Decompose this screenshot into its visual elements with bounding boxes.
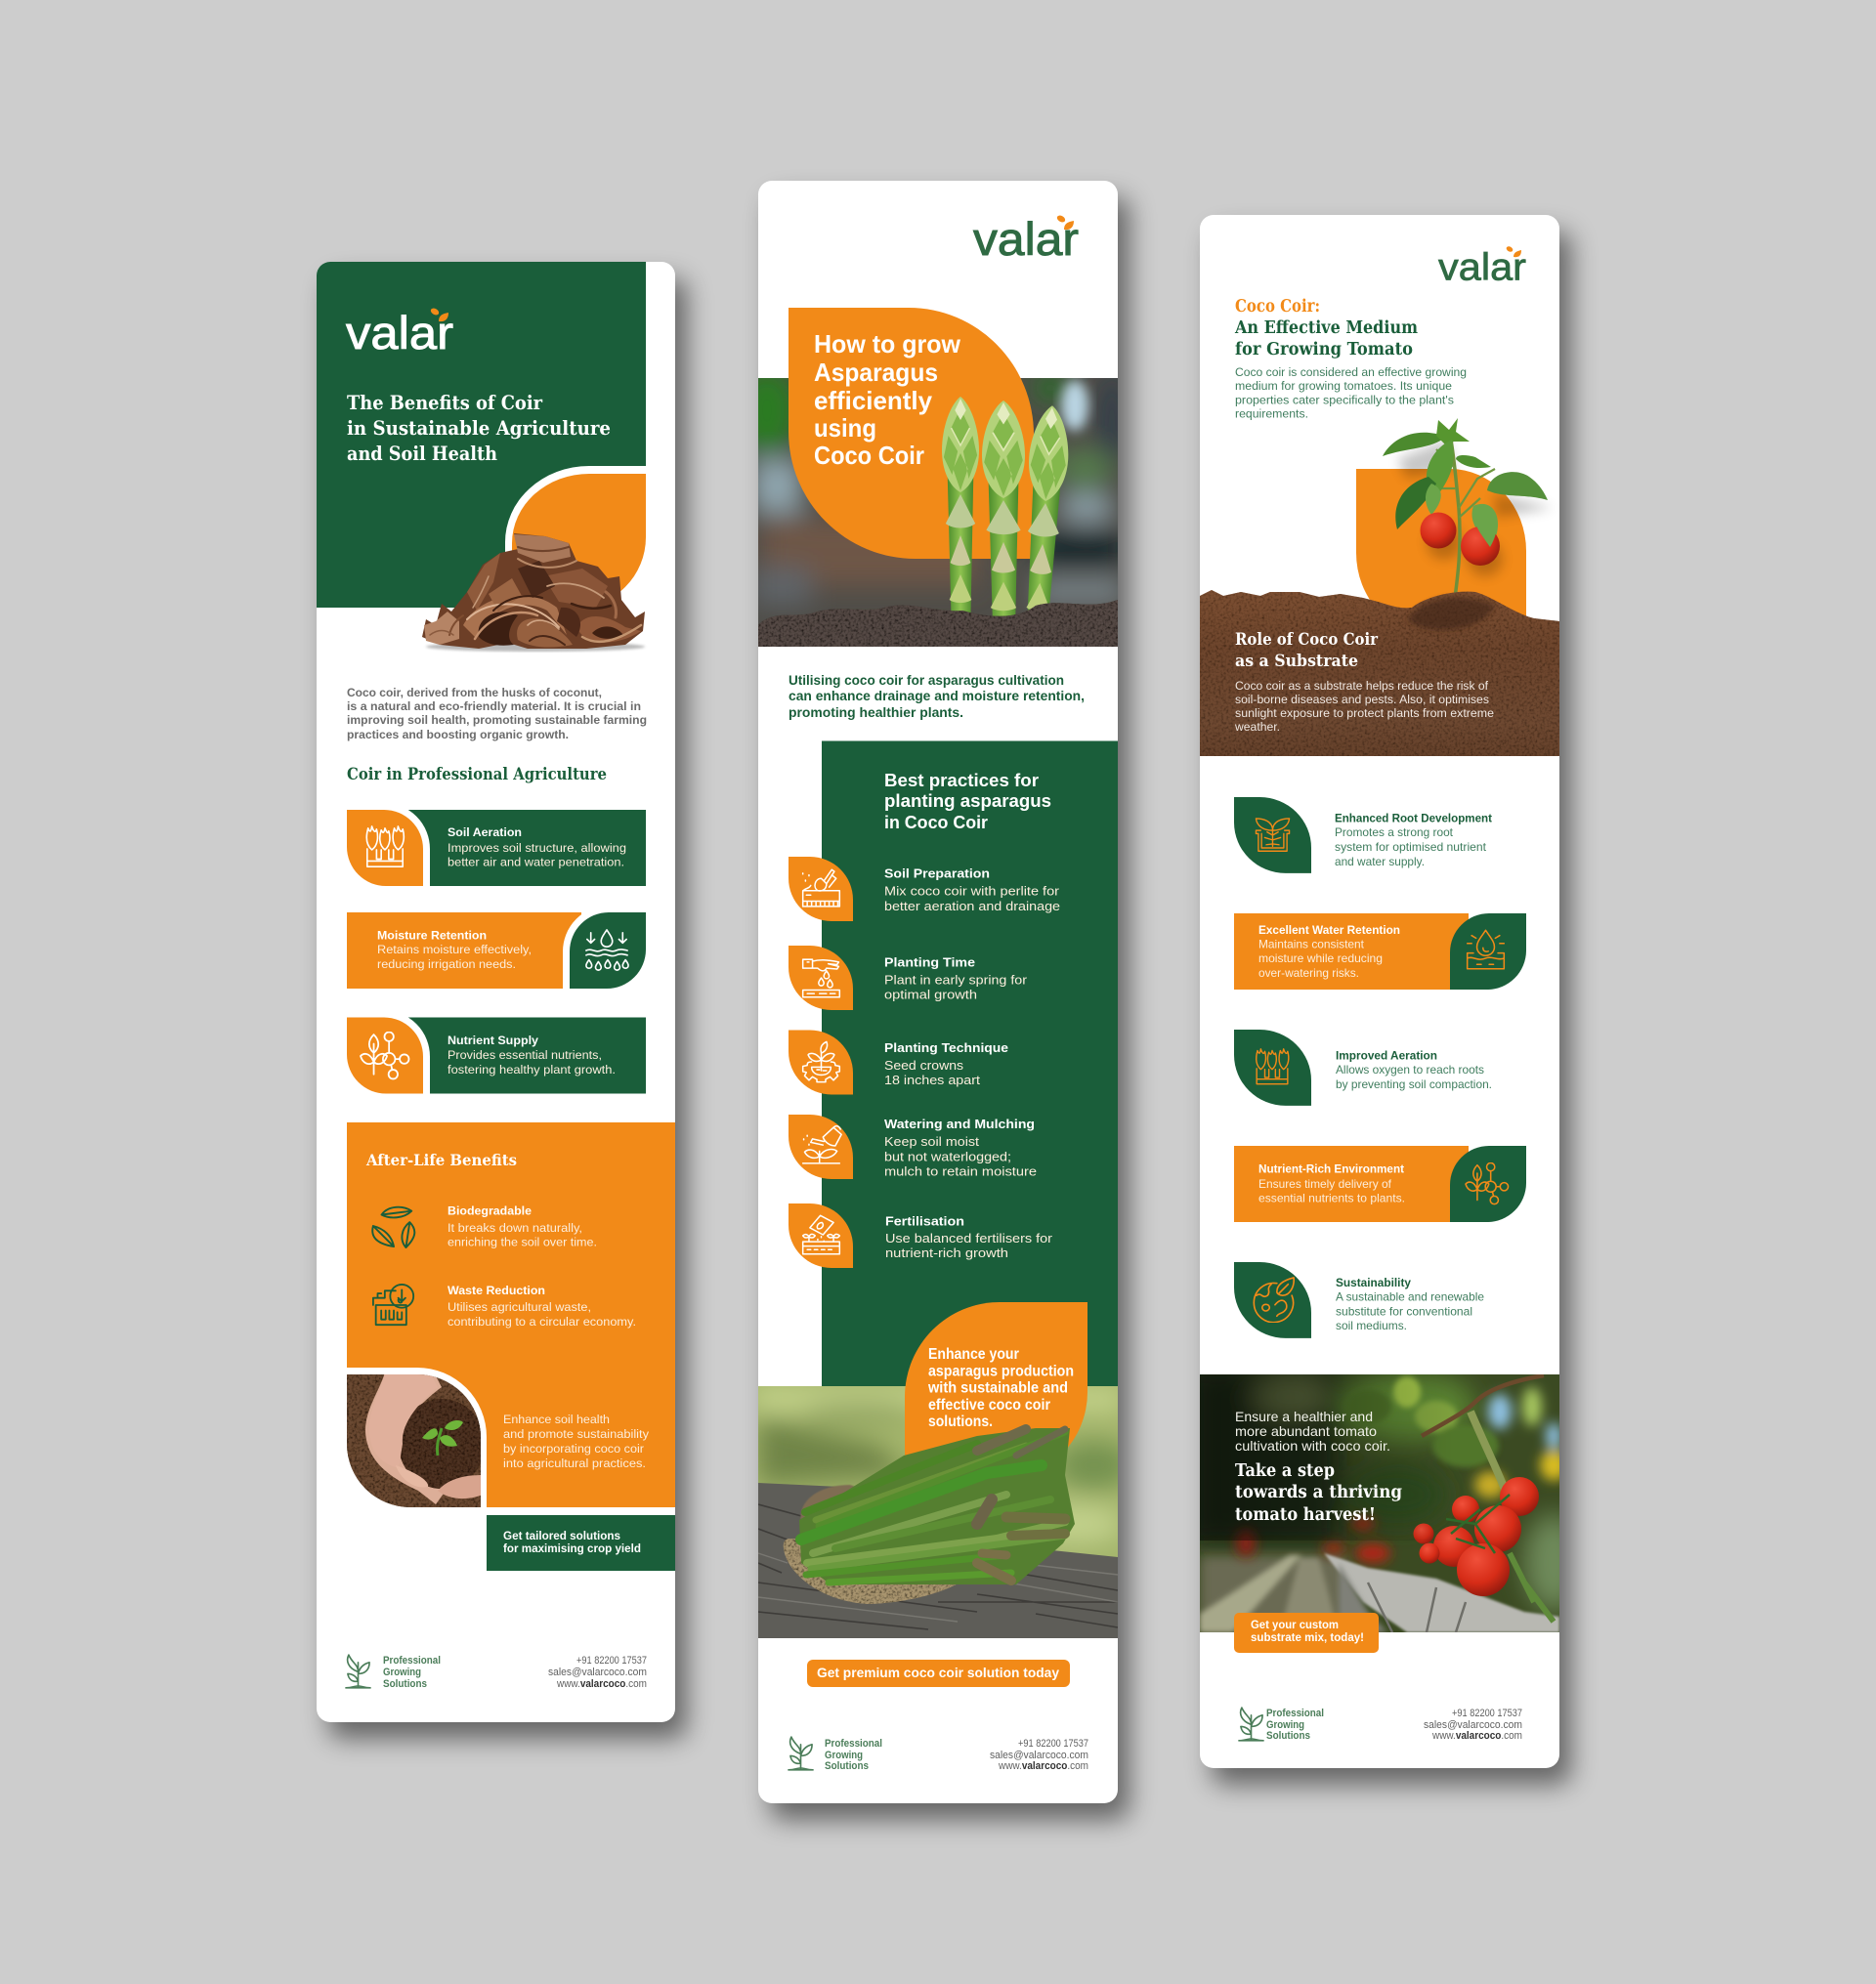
button: substrate mix, today! <box>1251 1632 1364 1644</box>
row: nutrient supply: Nutrient Supply <box>448 1034 538 1047</box>
footer: sales@valarcoco.com <box>1424 1719 1522 1731</box>
orange leaf shape with title: Asparagus <box>814 358 938 387</box>
closing text: Enhance soil health <box>503 1413 610 1426</box>
step: planting technique: Planting Technique <box>884 1040 1008 1055</box>
intro text: practices and boosting organic growth. <box>347 728 569 741</box>
heading <box>884 770 1051 832</box>
closing text: into agricultural practices. <box>503 1456 646 1470</box>
title: An Effective Medium <box>1234 318 1418 338</box>
intro text <box>789 672 1085 720</box>
intro text: Utilising coco coir for asparagus cultivation <box>789 672 1064 688</box>
closing text <box>1235 1409 1390 1454</box>
substrate text: soil-borne diseases and pests. Also, it optimises <box>1235 693 1489 706</box>
substrate text: sunlight exposure to protect plants from extreme <box>1235 706 1494 720</box>
row: enhanced root development: and water supply. <box>1335 855 1425 868</box>
intro text: promoting healthier plants. <box>789 704 963 720</box>
photo: greenhouse tomatoes <box>1192 1368 1583 1633</box>
intro text <box>1235 365 1467 420</box>
row: moisture retention: reducing irrigation needs. <box>377 957 516 971</box>
title <box>347 395 610 461</box>
closing text <box>503 1413 650 1470</box>
call to action <box>487 1515 675 1571</box>
white cut-out <box>347 1368 487 1509</box>
row: moisture retention: Retains moisture effectively, <box>377 943 532 956</box>
button: Get premium coco coir solution today <box>817 1665 1059 1680</box>
intro text <box>347 686 647 741</box>
row: enhanced root development: system for optimised nutrient <box>1335 840 1487 854</box>
row: excellent water retention: over-watering risks. <box>1258 966 1359 980</box>
footer: +91 82200 17537 <box>1018 1738 1088 1750</box>
row: nutrient-rich environment: essential nutrients to plants. <box>1258 1192 1405 1205</box>
step: watering and mulching: Keep soil moist <box>884 1134 979 1149</box>
closing text: more abundant tomato <box>1235 1423 1377 1439</box>
step: fertilisation: nutrient-rich growth <box>885 1245 1008 1260</box>
orange callout leaf: with sustainable and <box>927 1380 1068 1397</box>
intro text: Coco coir, derived from the husks of coconut, <box>347 686 602 699</box>
footer <box>346 1655 647 1690</box>
row: nutrient supply: fostering healthy plant growth. <box>448 1063 616 1076</box>
row: improved aeration: by preventing soil compaction. <box>1336 1077 1492 1091</box>
waste reduction text: Utilises agricultural waste, <box>448 1300 591 1314</box>
row: improved aeration <box>1234 1030 1492 1106</box>
logo: valar <box>1438 247 1526 289</box>
row: nutrient supply <box>347 1018 646 1094</box>
row: sustainability: Sustainability <box>1336 1276 1411 1289</box>
heading: in Coco Coir <box>884 812 988 832</box>
row: nutrient-rich environment <box>1234 1146 1526 1222</box>
orange leaf shape with title <box>789 308 1034 559</box>
footer: Growing <box>1266 1719 1304 1731</box>
title: for Growing Tomato <box>1235 340 1413 359</box>
step: soil preparation: Mix coco coir with perlite for <box>884 883 1060 898</box>
call-out heading: towards a thriving <box>1235 1483 1402 1502</box>
row: excellent water retention <box>1234 913 1526 990</box>
footer: www.valarcoco.com <box>998 1760 1088 1772</box>
step: planting time: optimal growth <box>884 987 977 1002</box>
step: fertilisation: Fertilisation <box>885 1214 964 1229</box>
substrate text <box>1234 679 1494 734</box>
orange callout leaf <box>905 1302 1087 1480</box>
orange callout leaf: asparagus production <box>928 1364 1074 1380</box>
button: Get your custom <box>1251 1620 1339 1631</box>
step: planting technique: Seed crowns <box>884 1058 963 1073</box>
substrate heading: as a Substrate <box>1235 652 1358 670</box>
orange leaf shape with title: Coco Coir <box>814 441 924 470</box>
step: watering and mulching <box>789 1115 1037 1179</box>
photo: asparagus shoots background <box>758 378 1118 625</box>
call to action: Get tailored solutions <box>503 1531 620 1542</box>
panel: card 1, benefits of coir <box>317 262 675 1722</box>
orange leaf shape <box>512 474 646 592</box>
orange callout leaf: effective coco coir <box>928 1397 1050 1414</box>
icon: recycling leaves <box>372 1207 414 1247</box>
orange callout leaf: solutions. <box>928 1414 993 1430</box>
photo: coir husk pile <box>422 533 645 652</box>
orange leaf shape with title: efficiently <box>814 386 933 415</box>
waste reduction text: Waste Reduction <box>448 1284 545 1297</box>
orange leaf shape with title: How to grow <box>814 329 961 359</box>
intro text: is a natural and eco-friendly material. It is crucial in <box>347 699 641 713</box>
closing text: Ensure a healthier and <box>1235 1409 1373 1424</box>
step: planting technique: 18 inches apart <box>884 1073 980 1087</box>
biodegradable text: It breaks down naturally, <box>448 1221 582 1235</box>
title: The Benefits of Coir <box>347 391 542 414</box>
step: planting time <box>789 946 1028 1010</box>
row: moisture retention: Moisture Retention <box>377 928 487 942</box>
title: Coco Coir: <box>1235 297 1320 317</box>
footer: sales@valarcoco.com <box>548 1667 647 1678</box>
step: planting time: Planting Time <box>884 955 975 970</box>
heading: After-Life Benefits <box>365 1151 517 1169</box>
footer: Growing <box>825 1750 863 1761</box>
waste reduction text <box>448 1284 636 1329</box>
biodegradable text <box>448 1203 597 1248</box>
footer: Growing <box>383 1667 421 1678</box>
footer: Solutions <box>1266 1730 1310 1742</box>
row: nutrient supply: Provides essential nutrients, <box>448 1048 602 1062</box>
panel: best practices <box>789 740 1118 1387</box>
basket <box>800 1485 879 1524</box>
step: soil preparation: Soil Preparation <box>884 866 990 881</box>
orange callout leaf: Enhance your <box>928 1346 1019 1363</box>
aisle floor <box>1200 1555 1346 1633</box>
footer: sales@valarcoco.com <box>990 1750 1088 1761</box>
title: and Soil Health <box>347 442 497 465</box>
photo: asparagus shoots and soil <box>758 397 1118 647</box>
row: soil aeration: Improves soil structure, allowing <box>448 841 626 855</box>
call-out heading: tomato harvest! <box>1235 1505 1376 1525</box>
row: excellent water retention: Maintains consistent <box>1258 938 1365 951</box>
intro text: can enhance drainage and moisture retention, <box>789 688 1085 703</box>
step: watering and mulching: mulch to retain moisture <box>884 1164 1037 1179</box>
card shadows <box>328 197 1571 1820</box>
row: sustainability: A sustainable and renewable <box>1336 1289 1484 1303</box>
intro text: improving soil health, promoting sustainable farming <box>347 713 647 727</box>
call to action: for maximising crop yield <box>503 1543 641 1555</box>
step: soil preparation: better aeration and drainage <box>884 899 1060 913</box>
step: watering and mulching: but not waterlogged; <box>884 1150 1011 1164</box>
intro text: medium for growing tomatoes. Its unique <box>1235 379 1452 393</box>
footer: www.valarcoco.com <box>1431 1730 1522 1742</box>
heading: planting asparagus <box>884 790 1051 811</box>
biodegradable text: Biodegradable <box>448 1203 532 1217</box>
icon: waste bin <box>373 1285 413 1325</box>
row: excellent water retention: Excellent Water Retention <box>1258 923 1400 937</box>
row: improved aeration: Allows oxygen to reach roots <box>1336 1063 1484 1076</box>
row: enhanced root development: Enhanced Root Development <box>1335 812 1492 825</box>
panel: card 3, tomato <box>1192 215 1583 1768</box>
row: sustainability: substitute for conventional <box>1336 1305 1472 1319</box>
waste reduction text: contributing to a circular economy. <box>448 1315 636 1329</box>
intro text: properties cater specifically to the plant's <box>1235 393 1454 406</box>
closing text: by incorporating coco coir <box>503 1442 644 1456</box>
row: moisture retention <box>347 912 646 989</box>
footer: Professional <box>383 1655 441 1667</box>
footer: Professional <box>1266 1708 1324 1719</box>
photo: hands holding soil <box>347 1372 485 1507</box>
row: sustainability <box>1234 1262 1484 1338</box>
orange leaf shape with title: using <box>814 413 876 443</box>
panel: card 2, asparagus <box>736 181 1133 1803</box>
footer: +91 82200 17537 <box>1452 1708 1522 1719</box>
footer <box>789 1737 1088 1772</box>
step: soil preparation <box>789 857 1060 921</box>
closing text: cultivation with coco coir. <box>1235 1438 1390 1454</box>
header green block <box>317 262 646 608</box>
row: nutrient-rich environment: Nutrient-Rich Environment <box>1258 1162 1404 1176</box>
panel: after-life benefits <box>347 1122 675 1509</box>
call-out heading <box>1235 1461 1402 1525</box>
step: planting time: Plant in early spring for <box>884 973 1028 987</box>
bundle base <box>799 1428 1075 1584</box>
footer: Solutions <box>383 1678 427 1690</box>
row: soil aeration: better air and water penetration. <box>448 856 624 869</box>
step: planting technique <box>789 1030 1008 1094</box>
row: sustainability: soil mediums. <box>1336 1319 1407 1332</box>
photo: tomato plant <box>1383 418 1554 606</box>
title <box>1234 297 1418 359</box>
closing text: and promote sustainability <box>503 1427 650 1441</box>
heading: Best practices for <box>884 770 1039 790</box>
intro text: Coco coir is considered an effective growing <box>1235 365 1467 379</box>
substrate heading: Role of Coco Coir <box>1235 630 1378 649</box>
photo: wooden table, basket and asparagus <box>758 1428 1118 1638</box>
row: enhanced root development <box>1234 797 1492 873</box>
footer: www.valarcoco.com <box>556 1678 647 1690</box>
footer: Solutions <box>825 1760 869 1772</box>
button <box>1234 1613 1379 1653</box>
logo: valar <box>346 307 453 359</box>
row: enhanced root development: Promotes a strong root <box>1335 825 1454 839</box>
step: fertilisation: Use balanced fertilisers for <box>885 1231 1053 1245</box>
step: watering and mulching: Watering and Mulching <box>884 1117 1035 1131</box>
biodegradable text: enriching the soil over time. <box>448 1235 597 1248</box>
footer <box>1239 1708 1522 1742</box>
footer: Professional <box>825 1738 882 1750</box>
call-out heading: Take a step <box>1235 1461 1335 1481</box>
row: excellent water retention: moisture while reducing <box>1258 951 1383 965</box>
title: in Sustainable Agriculture <box>347 416 611 440</box>
photo: asparagus background <box>752 1386 1133 1638</box>
logo: valar <box>973 213 1079 265</box>
row: soil aeration <box>347 810 646 886</box>
substrate text: Coco coir as a substrate helps reduce the risk of <box>1235 679 1489 693</box>
grow bag <box>1324 1553 1559 1632</box>
intro text: requirements. <box>1235 406 1308 420</box>
section heading: Coir in Professional Agriculture <box>347 765 607 783</box>
row: nutrient-rich environment: Ensures timely delivery of <box>1258 1177 1392 1191</box>
row: soil aeration: Soil Aeration <box>448 825 522 839</box>
orange leaf shape <box>1356 469 1526 635</box>
row: improved aeration: Improved Aeration <box>1336 1049 1437 1063</box>
photo: soil with substrate text <box>1200 590 1559 756</box>
step: fertilisation <box>789 1203 1053 1268</box>
substrate heading <box>1235 630 1378 670</box>
button <box>807 1660 1070 1687</box>
footer: +91 82200 17537 <box>576 1655 647 1667</box>
substrate text: weather. <box>1234 720 1280 734</box>
